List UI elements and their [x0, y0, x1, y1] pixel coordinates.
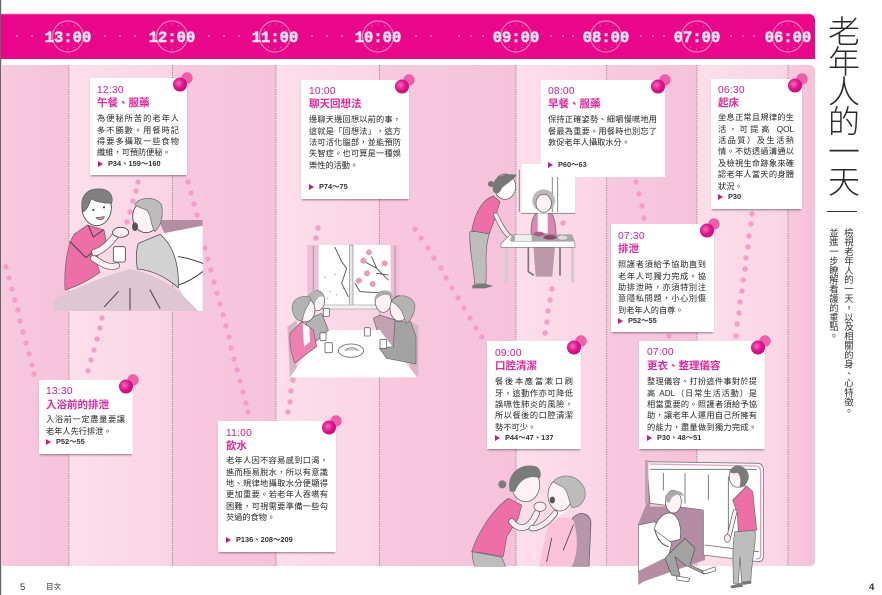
body text: 為便秘所苦的老年人: [97, 114, 179, 123]
body text: [46, 415, 125, 436]
subtitle text: 並進一步瞭解看護的重點。: [828, 228, 839, 341]
pin: [788, 73, 808, 92]
pin: [395, 74, 415, 94]
body text: 牙，這動作亦可降低: [495, 389, 573, 398]
clock 06:00: 06:00: [765, 29, 811, 47]
body text: 纖維，可預防便秘。: [97, 148, 171, 157]
body text: 老年人因不容易感到口渴，: [226, 456, 328, 465]
body text: [618, 260, 706, 315]
heading: 早餐、服藥: [548, 98, 600, 110]
body text: 的能力，盡量做到獨力完成。: [647, 423, 757, 432]
page reference: P74～75: [319, 182, 348, 191]
time: 10:00: [309, 86, 336, 97]
body text: 這就是「回想法」，這方: [309, 127, 401, 136]
page reference: [718, 192, 741, 201]
body text: 誤嚥性肺炎的風險，: [495, 400, 573, 409]
card: 11:00 drinking water: [218, 421, 336, 552]
body text: [226, 456, 328, 522]
body text: 老年人可獨力完成。協: [618, 272, 706, 281]
timeline background bands: [1, 65, 815, 566]
time: 13:30: [46, 386, 73, 397]
body text: 勢不可少。: [495, 423, 536, 432]
body text: 整理儀容、打扮這件事對於提: [647, 377, 757, 386]
illustration: serving breakfast: [470, 164, 575, 288]
heading: 入浴前的排泄: [46, 399, 109, 411]
time: 07:30: [618, 231, 645, 242]
pin: [651, 74, 671, 94]
card: 08:00 breakfast and medicine: [541, 80, 665, 177]
pin: [751, 335, 771, 354]
body text: 助排泄時，亦須特別注: [618, 283, 706, 292]
title rule: [827, 211, 857, 212]
clock 11:00: 11:00: [252, 29, 298, 47]
body text: 敦促老年人攝取水分。: [548, 138, 630, 147]
body text: [495, 377, 573, 432]
page reference: P52～55: [628, 316, 657, 325]
body text: 相當重要的。照護者須給予協: [647, 400, 757, 409]
time: 11:00: [226, 428, 252, 439]
body text: 保持正確姿勢、細嚼慢嚥地用: [548, 115, 657, 124]
clock 09:00: [493, 21, 539, 52]
header time bar: [1, 13, 815, 59]
body text: 邊聊天邊回想以前的事，: [309, 115, 401, 124]
body text: 到老年人的自尊。: [618, 306, 684, 315]
body text: 更加重要。若老年人吞嚥有: [226, 490, 328, 499]
body text: 意隱私問題，小心別傷: [618, 294, 706, 303]
heading: 聊天回想法: [309, 98, 362, 110]
body text: 認老年人當天的身體: [718, 170, 794, 179]
page reference: P30、48～51: [657, 433, 701, 442]
page edge: [0, 0, 1, 595]
pin: [173, 72, 193, 92]
page reference: P30: [728, 192, 741, 201]
body text: 所以餐後的口腔清潔: [495, 411, 573, 420]
page reference: P34、159～160: [108, 159, 161, 168]
pin: [700, 218, 720, 238]
subtitle text: [828, 228, 854, 416]
heading: 起床: [718, 97, 739, 109]
heading: 更衣、整理儀容: [647, 360, 720, 372]
body text: 活品質）及生活熱: [718, 136, 794, 145]
body text: 失智症。也可算是一種娛: [309, 149, 401, 158]
heading: 排泄: [618, 243, 639, 255]
body text: 入浴前一定盡量要讓: [46, 415, 125, 424]
body text: [309, 115, 401, 170]
page reference: P44～47、137: [505, 433, 553, 442]
clock 13:00: 13:00: [45, 29, 91, 47]
page reference: P52～55: [56, 437, 85, 446]
body text: 得要多攝取一些食物: [97, 137, 179, 146]
clock 07:00: [674, 21, 720, 52]
body text: 法可活化腦部，並能預防: [309, 138, 401, 147]
clock 08:00: 08:00: [583, 29, 629, 47]
time: 12:30: [97, 85, 124, 96]
body text: 芡過的食物。: [226, 513, 275, 522]
clock 12:00: 12:00: [149, 29, 195, 47]
time: 08:00: [548, 86, 575, 97]
clock 06:00: [765, 21, 811, 52]
body text: [97, 114, 179, 157]
page reference: P136、208～209: [236, 535, 293, 544]
dotted timeline route: [3, 179, 755, 415]
card: 07:00 dressing and grooming: [639, 341, 765, 449]
card: 12:30 lunch and medicine: [90, 78, 187, 175]
card: 06:30 waking up: [711, 79, 802, 209]
page number left: 5: [20, 582, 25, 593]
body text: 高 ADL（日常生活活動）是: [647, 389, 757, 398]
page number right: 4: [869, 582, 874, 593]
body text: [718, 113, 794, 191]
card: 09:00 oral hygiene: [487, 341, 581, 449]
illustration: oral care: [472, 466, 591, 567]
clock 13:00: [45, 21, 91, 52]
pin: [567, 335, 587, 354]
clock 08:00: [583, 21, 629, 52]
illustration: dressing and grooming: [638, 460, 763, 588]
body text: [647, 377, 757, 432]
clock 12:00: [149, 21, 195, 52]
clock 07:00: 07:00: [674, 29, 720, 47]
clock 11:00: [252, 21, 298, 52]
heading: 午餐、服藥: [97, 97, 150, 109]
illustration: chatting by the window: [287, 245, 418, 378]
pin: [119, 374, 139, 394]
subtitle text: 檢視老年人的一天，以及相關的身、心特徵。: [843, 228, 854, 416]
body text: 及檢視生命跡象來確: [718, 159, 794, 168]
heading: 口腔清潔: [495, 360, 537, 372]
body text: 樂性的活動。: [309, 161, 358, 170]
body text: [548, 114, 657, 147]
body text: 坐息正常且規律的生: [718, 113, 794, 122]
card: 10:00 reminiscence chat: [301, 80, 409, 199]
body text: 狀況。: [718, 182, 743, 191]
clock 10:00: [355, 21, 401, 52]
body text: 困難，可視需要準備一些勾: [226, 502, 328, 511]
body text: 情。不妨透過溝通以: [718, 147, 794, 156]
body text: 助，讓老年人運用自己所擁有: [647, 411, 757, 420]
clock 10:00: 10:00: [355, 29, 401, 47]
body text: 地、規律地攝取水分便顯得: [226, 479, 328, 488]
time: 09:00: [495, 348, 522, 359]
body text: 多不勝數。用餐時記: [97, 126, 179, 135]
pin: [322, 415, 342, 434]
clock 09:00: 09:00: [493, 29, 539, 47]
body text: 老年人先行排泄。: [46, 427, 112, 436]
body text: 照護者須給予協助直到: [618, 260, 706, 269]
card: 07:30 toileting: [611, 224, 714, 332]
page reference: P60～63: [558, 160, 587, 169]
body text: 餐最為重要。用餐時也別忘了: [548, 127, 657, 136]
time: 07:00: [647, 347, 674, 358]
body text: 餐後本應當漱口刷: [495, 377, 573, 386]
body text: 進而極易脫水，所以有意識: [226, 468, 328, 477]
time: 06:30: [718, 85, 745, 96]
section label: 目次: [46, 582, 61, 591]
illustration: caregiver giving medicine at lunch: [53, 189, 203, 311]
title: 老年人的一天: [824, 15, 860, 195]
heading: 飲水: [226, 440, 247, 452]
card: 13:30 toileting before bath: [39, 380, 133, 454]
